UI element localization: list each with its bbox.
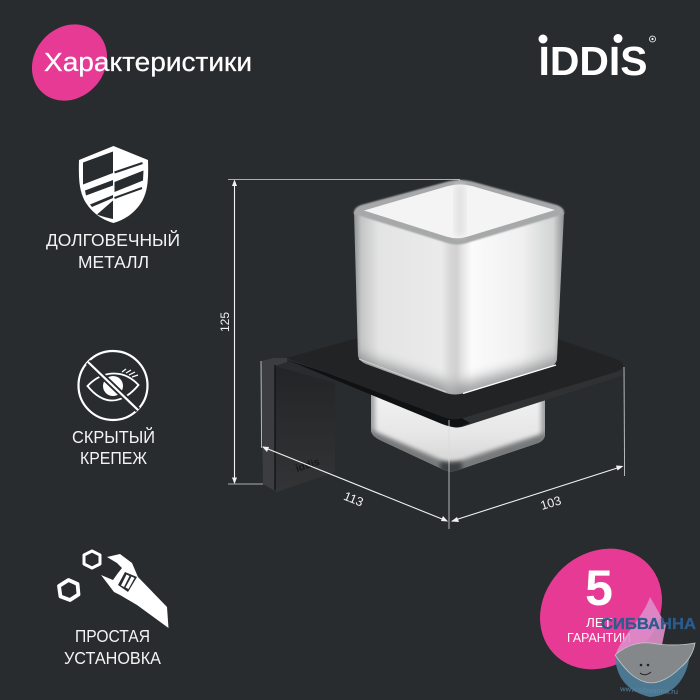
feature: durable metal bbox=[46, 146, 185, 272]
dimension: height 125: 125 bbox=[218, 312, 232, 332]
pink blob bbox=[515, 524, 687, 694]
label: easy install: ПРОСТАЯ bbox=[75, 626, 150, 646]
watermark drop bbox=[615, 597, 666, 656]
dimension: width 103: 103 bbox=[539, 493, 563, 513]
product: glass holder bbox=[261, 178, 623, 500]
shelf plate bbox=[287, 338, 623, 428]
watermark bathtub bbox=[615, 643, 695, 683]
upper part of glass bbox=[353, 179, 565, 394]
watermark: Сибванна bbox=[601, 597, 696, 697]
heading text: Характеристики bbox=[44, 49, 252, 77]
warranty label: ГАРАНТИИ bbox=[567, 631, 631, 645]
dimension: width 103 bbox=[451, 466, 624, 522]
feature: hidden mount bbox=[72, 351, 160, 468]
warranty badge bbox=[515, 524, 687, 694]
icon: crossed-out eye bbox=[78, 351, 148, 420]
label: hidden mount: СКРЫТЫЙ bbox=[72, 426, 155, 447]
dimension: height 125 bbox=[218, 180, 237, 484]
watermark url: www.sibvanna.ru bbox=[619, 686, 678, 696]
glass rim bbox=[354, 180, 564, 244]
watermark name: СИБВАННА bbox=[601, 616, 696, 633]
label: durable metal: ДОЛГОВЕЧНЫЙ bbox=[46, 229, 180, 250]
label: easy install: УСТАНОВКА bbox=[64, 648, 161, 668]
glass base highlight bbox=[463, 365, 556, 394]
logo: iDDIS: IDDIS bbox=[538, 38, 648, 84]
wall bracket bbox=[261, 358, 335, 492]
dimension: depth 113 bbox=[262, 446, 448, 522]
dimension: depth 113: 113 bbox=[342, 489, 365, 510]
pink blob behind heading bbox=[16, 9, 123, 116]
glass opening bbox=[364, 184, 555, 238]
warranty label: ЛЕТ bbox=[586, 616, 612, 630]
label: durable metal: МЕТАЛЛ bbox=[78, 252, 149, 272]
icon: shield bbox=[79, 146, 148, 223]
label: hidden mount: КРЕПЕЖ bbox=[80, 448, 147, 468]
wall bracket: iddis bbox=[294, 456, 321, 475]
number 5: 5 bbox=[585, 560, 613, 616]
dimension lines bbox=[218, 180, 624, 529]
icon: wrench and nuts bbox=[59, 551, 168, 628]
lower part of glass bbox=[371, 395, 545, 472]
heading: Характеристики bbox=[16, 9, 252, 116]
feature: easy install bbox=[59, 551, 168, 668]
